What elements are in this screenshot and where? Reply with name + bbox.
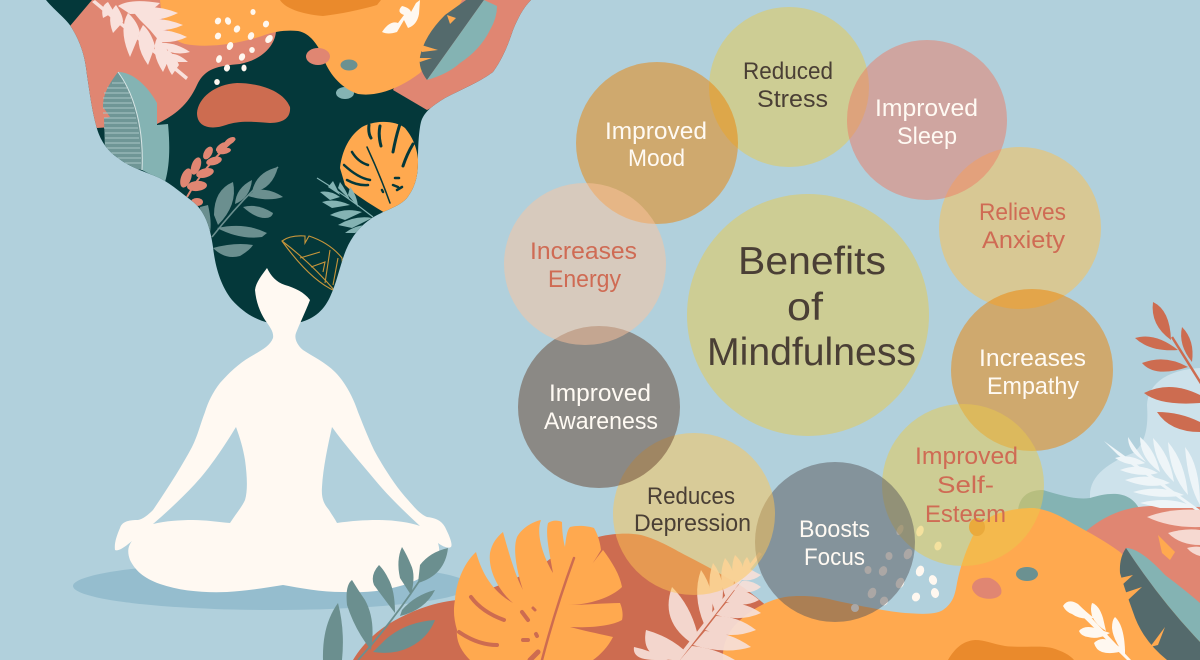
label: improved sleep: Improved: [875, 95, 978, 122]
circle: improved sleep: [847, 40, 1007, 200]
label: improved self-esteem: Improved: [915, 443, 1018, 470]
gold outline leaf: [282, 236, 342, 291]
label: increases empathy: Increases: [979, 345, 1086, 372]
terracotta branch: [1135, 302, 1200, 432]
label: relieves anxiety: [979, 199, 1066, 254]
banana leaf left: [118, 72, 169, 182]
circle: increases energy: [504, 183, 666, 345]
circle: center: [687, 194, 929, 436]
label: boosts focus: [799, 516, 870, 571]
label: reduced stress: [743, 58, 833, 113]
label: reduces depression: Reduces: [647, 483, 735, 510]
label: improved self-esteem: [915, 443, 1018, 528]
label: improved mood: Mood: [628, 145, 685, 172]
title: of: [787, 286, 823, 329]
ground shadow: [73, 562, 471, 610]
label: increases energy: [530, 238, 637, 293]
hair with botanical pattern: [46, 0, 531, 322]
large orange blob: [723, 508, 1200, 660]
label: boosts focus: Focus: [804, 544, 865, 571]
blobs: [306, 48, 330, 65]
plant by knee: [323, 547, 448, 660]
label: reduces depression: Depression: [634, 510, 751, 537]
circle: boosts focus: [755, 462, 915, 622]
circle: improved awareness: [518, 326, 680, 488]
dots on blob: [851, 524, 943, 612]
salmon blob: [1086, 506, 1200, 603]
teal branch: [200, 167, 283, 257]
dark orange blob: [948, 640, 1074, 660]
pink sprig: [178, 135, 237, 206]
label: reduced stress: Reduced: [743, 58, 833, 85]
label: improved self-esteem: Esteem: [925, 501, 1006, 528]
white dots: [214, 9, 274, 85]
label: improved mood: Improved: [605, 118, 707, 145]
white sprig: [382, 0, 420, 34]
label: increases empathy: [979, 345, 1086, 400]
label: increases energy: Increases: [530, 238, 637, 265]
banana leaf top right: [420, 0, 484, 80]
circle: improved self-esteem: [882, 404, 1044, 566]
orange monstera: [340, 122, 418, 213]
label: relieves anxiety: Anxiety: [982, 227, 1065, 254]
circle: relieves anxiety: [939, 147, 1101, 309]
frond: pale palm: [92, 0, 190, 80]
light blob: [1090, 368, 1200, 510]
label: boosts focus: Boosts: [799, 516, 870, 543]
label: reduced stress: Stress: [757, 86, 828, 113]
label: improved mood: [605, 118, 707, 172]
circle: increases empathy: [951, 289, 1113, 451]
teal fern: [317, 178, 373, 233]
label: increases energy: Energy: [548, 266, 621, 293]
circle: reduces depression: [613, 433, 775, 595]
small orange spot: [969, 518, 985, 536]
label: relieves anxiety: Relieves: [979, 199, 1066, 226]
label: improved sleep: Sleep: [897, 123, 957, 150]
white frond: [1104, 437, 1200, 512]
label: improved awareness: Awareness: [544, 408, 658, 435]
teal blob: [1018, 490, 1138, 531]
circle: reduced stress: [709, 7, 869, 167]
bottom right foliage: [323, 302, 1200, 660]
white sprig: [1063, 601, 1131, 660]
title: Mindfulness: [707, 331, 916, 374]
label: improved awareness: Improved: [549, 380, 651, 407]
monstera leaf: [454, 520, 623, 660]
circle: improved mood: [576, 62, 738, 224]
label: improved self-esteem: Self-: [937, 472, 994, 499]
label: reduces depression: [634, 483, 751, 537]
banana leaf bottom right: [1126, 548, 1200, 642]
terracotta hill: [353, 534, 780, 660]
salmon and teal spots: [972, 578, 1001, 599]
meditating figure: [115, 268, 452, 592]
pink frond part: [1147, 510, 1200, 556]
title: [707, 240, 916, 374]
palm frond: [634, 552, 762, 660]
label: improved sleep: [875, 95, 978, 150]
label: improved awareness: [544, 380, 658, 435]
title: Benefits: [738, 240, 886, 283]
label: increases empathy: Empathy: [987, 373, 1079, 400]
